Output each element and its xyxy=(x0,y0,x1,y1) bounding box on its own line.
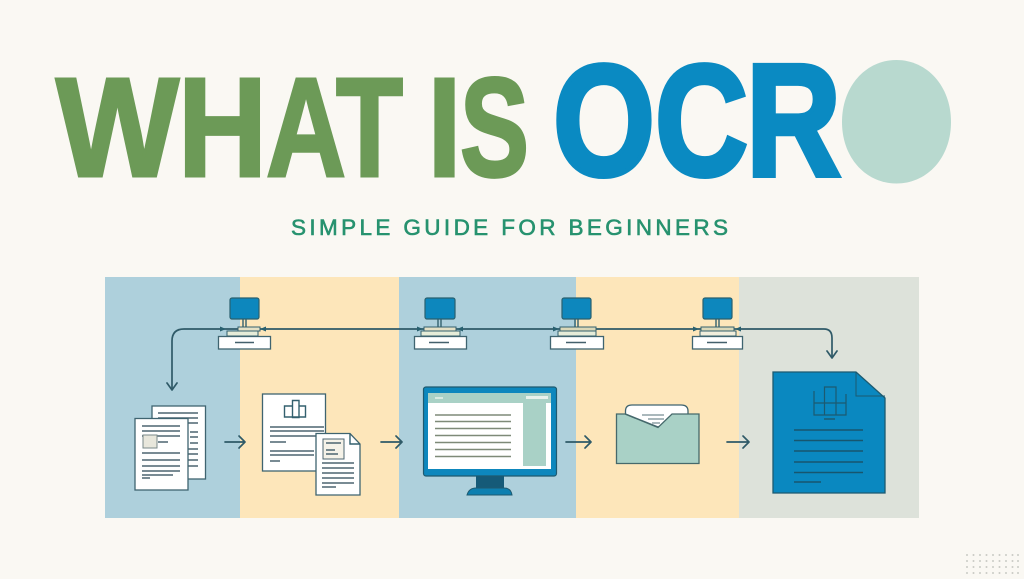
title words: WHAT IS: W xyxy=(56,48,179,206)
title word: OCR: O xyxy=(553,33,655,209)
title xyxy=(56,30,951,210)
subtitle: SIMPLE GUIDE FOR BEGINNERS xyxy=(291,215,728,240)
icon: final digital document xyxy=(773,372,885,493)
title word: OCR xyxy=(553,30,841,210)
title word: OCR: C xyxy=(655,33,748,209)
title words: WHAT IS: H xyxy=(178,48,267,206)
icon: monitor node 4 xyxy=(692,298,742,349)
icon: open folder with paper xyxy=(616,405,699,464)
icon: monitor node 1 xyxy=(218,298,270,349)
pale teal oval xyxy=(842,60,951,184)
icon: monitor node 2 xyxy=(414,298,466,349)
icon: stacked scanned pages xyxy=(135,406,206,490)
arrow: step 1 to 2 xyxy=(225,436,245,448)
title words: WHAT IS: S xyxy=(460,48,529,206)
title words: WHAT IS: A xyxy=(266,48,346,206)
arrow: step 2 to 3 xyxy=(381,436,402,448)
panel: step 4 background xyxy=(576,277,739,518)
connector line across the top xyxy=(167,329,837,390)
arrow: step 4 to 5 xyxy=(727,436,749,448)
panel: step 2 background xyxy=(240,277,399,518)
title word: OCR: R xyxy=(746,30,841,210)
title words: WHAT IS xyxy=(56,48,529,206)
title words: WHAT IS: T xyxy=(336,48,403,206)
title words: WHAT IS: I xyxy=(428,48,462,206)
arrow: step 3 to 4 xyxy=(566,436,591,448)
icon: monitor node 3 xyxy=(550,298,604,349)
panel: step 1 background xyxy=(105,277,240,518)
decorative dot grid xyxy=(966,554,1019,574)
panel: step 3 background xyxy=(399,277,576,518)
icon: desktop monitor with text xyxy=(424,387,556,495)
icon: document with small page xyxy=(262,394,360,495)
panel: step 5 background xyxy=(739,277,919,518)
process diagram xyxy=(105,277,919,518)
